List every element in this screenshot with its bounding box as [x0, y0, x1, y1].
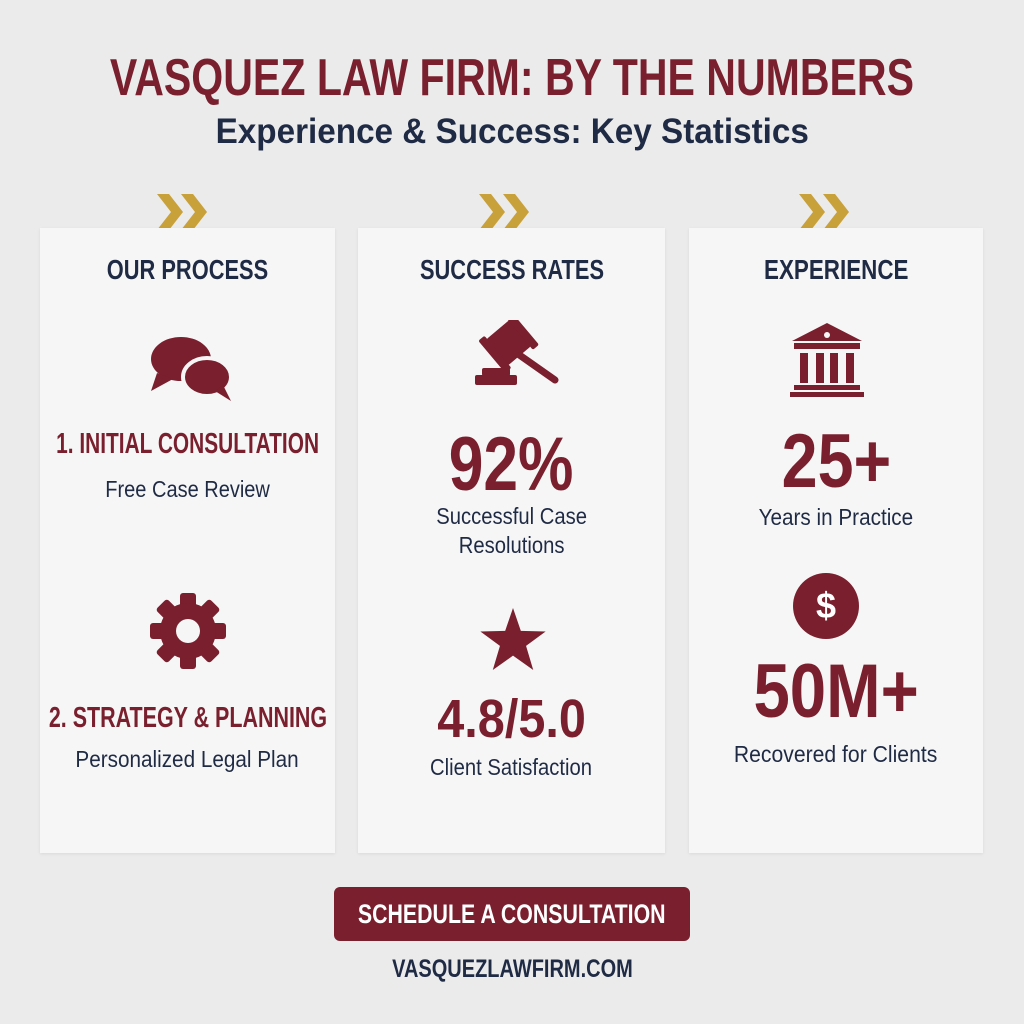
icon: chevrons 1 [157, 194, 207, 228]
icon: gavel [475, 320, 558, 385]
icon: chat bubbles [151, 337, 231, 401]
stat desc: Successful Case [436, 503, 587, 529]
subtitle: Experience & Success: Key Statistics [215, 112, 809, 151]
step 1 desc: Free Case Review [105, 476, 270, 502]
stat desc: Resolutions [459, 532, 564, 558]
icon: star [480, 608, 546, 670]
stat: 92%: 92% [449, 422, 574, 507]
panel: experience [689, 228, 983, 853]
button: schedule [334, 887, 690, 941]
icon: chevrons 2 [479, 194, 529, 228]
icon: courthouse [790, 323, 864, 397]
icon: dollar: $ [816, 585, 836, 626]
panel: our process [40, 228, 335, 853]
button: schedule: SCHEDULE A CONSULTATION [358, 899, 666, 929]
stat desc: Years in Practice [759, 504, 913, 530]
stat: 25+: 25+ [781, 419, 891, 504]
icon: chevrons 3 [799, 194, 849, 228]
step 2: 2. STRATEGY & PLANNING [48, 702, 327, 734]
url: VASQUEZLAWFIRM.COM [392, 955, 632, 983]
icon: dollar [793, 573, 859, 639]
title: VASQUEZ LAW FIRM: BY THE NUMBERS [110, 49, 914, 107]
heading: experience: EXPERIENCE [764, 254, 908, 285]
heading: our process: OUR PROCESS [107, 254, 268, 285]
panel: success rates [358, 228, 665, 853]
stat desc: Recovered for Clients [734, 741, 938, 767]
stat: 4.8/5.0: 4.8/5.0 [437, 689, 586, 749]
stat desc [436, 503, 587, 558]
step 1: 1. INITIAL CONSULTATION [56, 428, 319, 460]
icon: gear [150, 593, 226, 669]
stat desc: Client Satisfaction [430, 754, 593, 780]
heading: success rates: SUCCESS RATES [419, 254, 604, 285]
stat: 50M+: 50M+ [753, 649, 919, 734]
step 2 desc: Personalized Legal Plan [76, 746, 299, 772]
